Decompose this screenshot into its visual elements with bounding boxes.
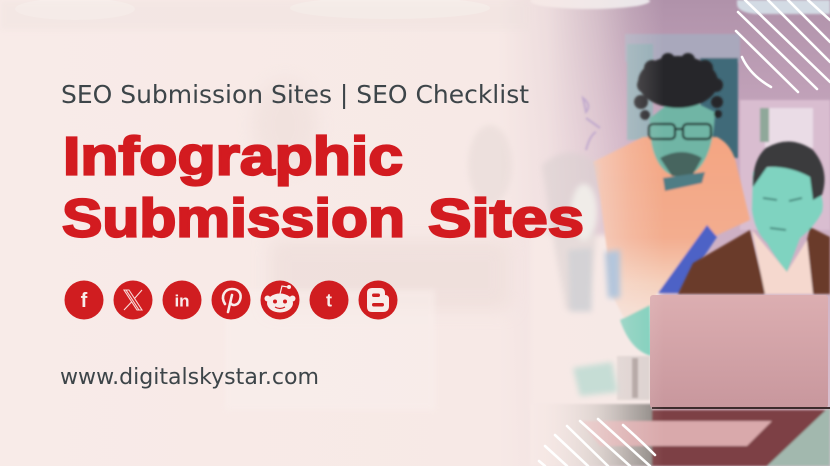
icon: X (114, 280, 152, 320)
pale lower wall behind seated woman (530, 235, 660, 408)
curly hair (634, 53, 723, 120)
title: Sites (428, 188, 584, 248)
glass partition window (625, 34, 830, 230)
man with glasses and orange shirt (593, 53, 750, 356)
blue sleeve band (658, 225, 717, 293)
shirt collar (752, 230, 813, 294)
title: Infographic (63, 126, 403, 186)
icon: linkedin (162, 280, 202, 320)
teal face (650, 95, 715, 177)
website url: www.digitalskystar.com (60, 364, 319, 390)
icon: facebook: f (81, 290, 88, 312)
title (62, 126, 584, 248)
drinking glass (617, 356, 650, 400)
social icons row (64, 280, 398, 320)
bow tie (663, 172, 705, 191)
ceiling lamps (530, 0, 830, 14)
icon: linkedin: in (174, 292, 190, 310)
teal cuff (620, 305, 651, 356)
icon: blogger (358, 280, 398, 320)
icon: reddit (260, 280, 300, 320)
decorative stripes: bottom (539, 419, 655, 466)
faded plant leaves (583, 98, 600, 150)
subtitle: SEO Submission Sites | SEO Checklist (61, 80, 529, 109)
seated man with brown jacket (678, 141, 830, 294)
laptop (650, 295, 830, 409)
icon: facebook (64, 280, 104, 320)
icon: tumblr: t (326, 290, 332, 310)
beard (660, 152, 702, 176)
facial features (763, 198, 802, 230)
icon: pinterest (212, 280, 250, 320)
faded background figures (0, 0, 620, 410)
decorative stripes: top right (736, 0, 830, 92)
orange shirt (593, 137, 750, 320)
face and neck (752, 167, 823, 272)
title: Submission (62, 188, 405, 248)
jacket (678, 227, 830, 294)
glasses (649, 124, 711, 139)
desk (530, 404, 830, 466)
icon: tumblr (310, 280, 348, 320)
faded woman (542, 152, 620, 396)
hair (753, 141, 825, 200)
